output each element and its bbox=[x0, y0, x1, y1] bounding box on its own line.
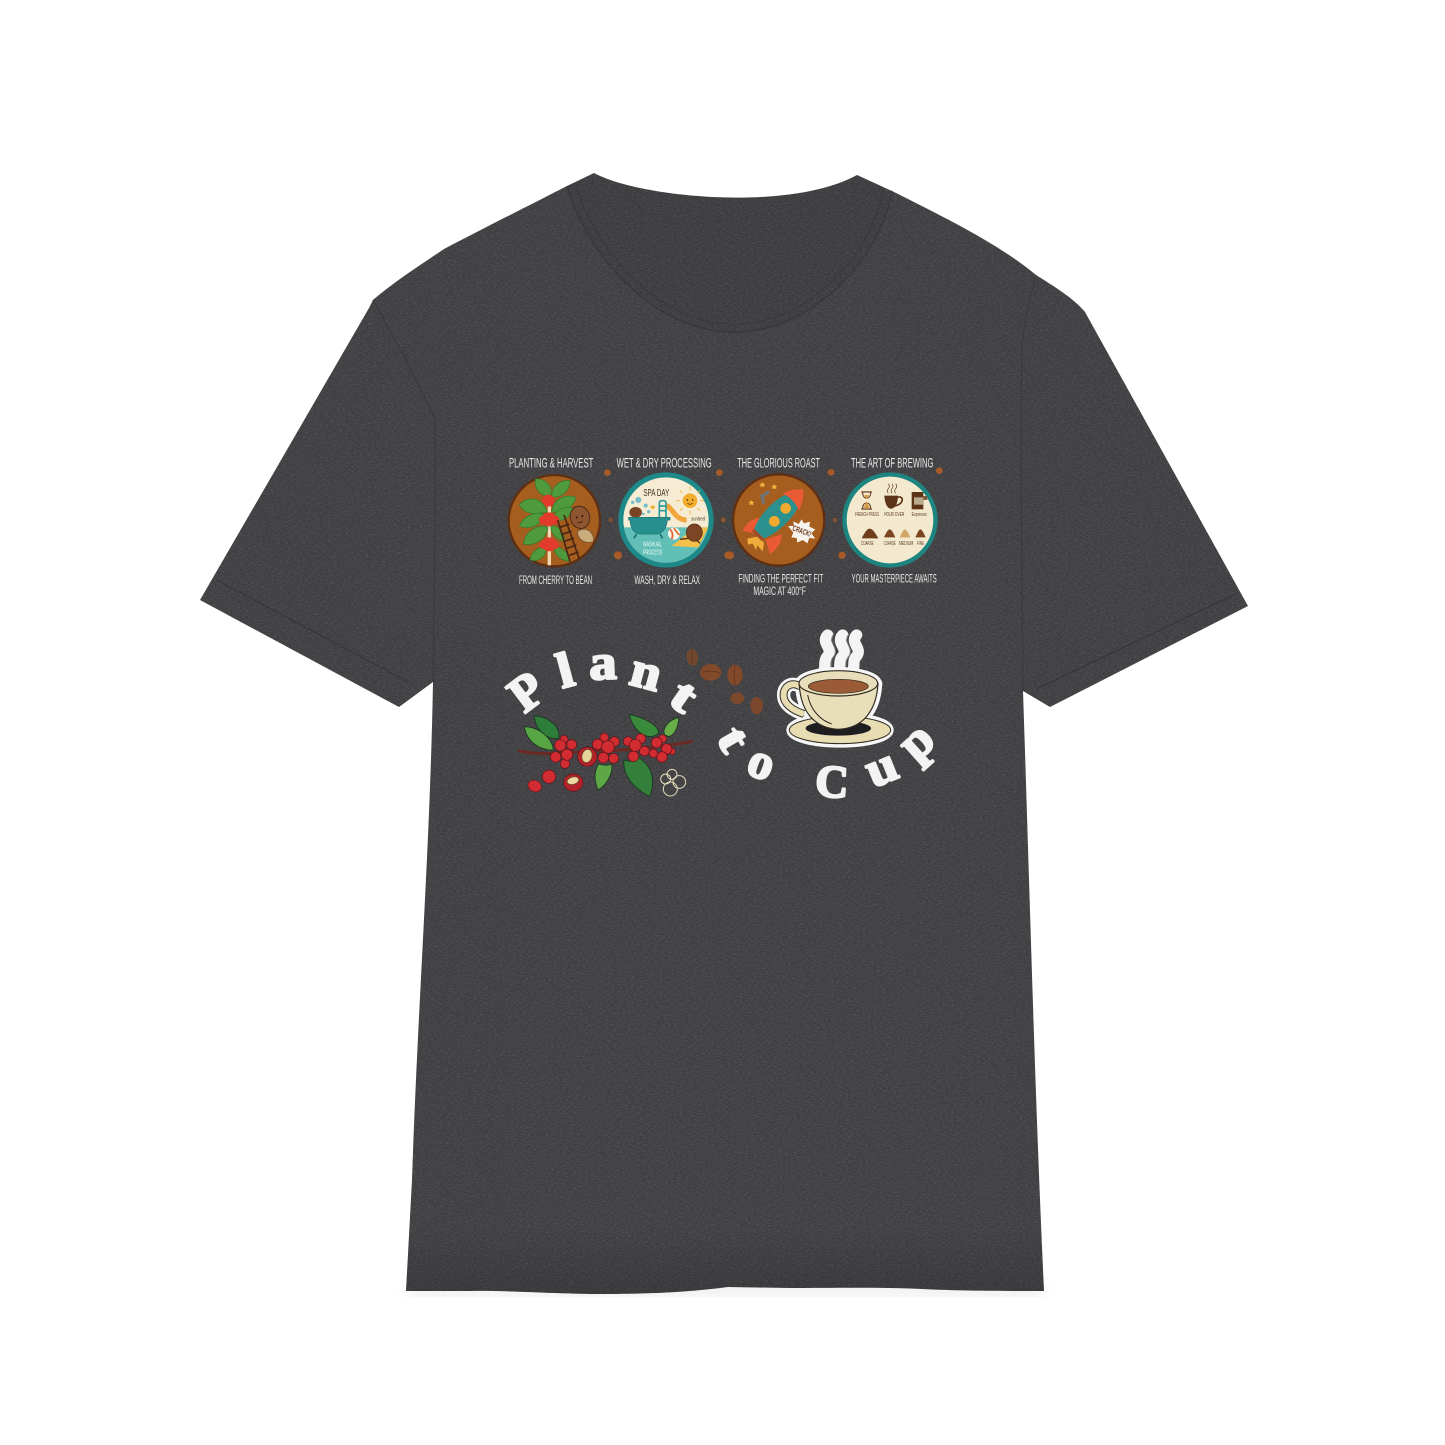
icon: spa day badge: PROCESS bbox=[643, 548, 662, 557]
title: Plant to Cup curved lettering: t bbox=[707, 717, 762, 761]
icon: brewing guide badge: Espresso bbox=[912, 512, 927, 518]
icon: spa day badge: sunbed bbox=[691, 517, 705, 523]
caption: wash dry and relax: WASH, DRY & RELAX bbox=[634, 573, 700, 587]
decorative bean dots bbox=[721, 467, 943, 559]
panel: process badges right (roasting and brewing): YOUR MASTERPIECE AWAITS bbox=[852, 572, 937, 586]
icon: brewing guide badge: MEDIUM bbox=[899, 541, 914, 547]
title: Plant to Cup curved lettering: P bbox=[497, 660, 555, 723]
icon: brewing guide badge: FRENCH PRESS bbox=[855, 512, 879, 518]
icon: spa day badge: WASHUAL bbox=[643, 540, 662, 549]
icon: brewing guide badge: COARSE bbox=[884, 541, 896, 547]
icon: brewing guide badge: POUR OVER bbox=[884, 512, 904, 518]
icon: rocket roast badge: CRACK! bbox=[791, 524, 812, 539]
icon: rocket roast badge bbox=[733, 474, 824, 566]
title: Plant to Cup curved lettering: C bbox=[814, 755, 850, 808]
illustration: scattered coffee beans bbox=[686, 648, 763, 714]
heading: planting and harvest: PLANTING & HARVEST bbox=[509, 454, 594, 470]
heading: wet and dry processing: WET & DRY PROCESSING bbox=[617, 454, 712, 470]
heading: the glorious roast: THE GLORIOUS ROAST bbox=[737, 454, 820, 470]
icon: coffee plant badge bbox=[509, 475, 600, 566]
panel: process badges left (planting and processing) bbox=[509, 454, 732, 587]
decorative bean dots bbox=[604, 469, 732, 559]
title: Plant to Cup curved lettering: a bbox=[588, 635, 618, 691]
title: Plant to Cup curved lettering: o bbox=[741, 731, 783, 792]
illustration: coffee branch with cherries bbox=[519, 714, 692, 797]
icon: spa day badge bbox=[618, 472, 714, 568]
panel: process badges right (roasting and brewing) bbox=[721, 454, 943, 598]
steam bbox=[824, 634, 858, 670]
heading: the art of brewing: THE ART OF BREWING bbox=[851, 454, 933, 470]
title: Plant to Cup curved lettering bbox=[497, 635, 945, 808]
title: Plant to Cup curved lettering: p bbox=[886, 711, 945, 772]
title: Plant to Cup curved lettering: n bbox=[625, 642, 668, 703]
title: Plant to Cup curved lettering: t bbox=[660, 668, 708, 724]
caption: finding the perfect fit, magic at 400F: MAGIC AT 400°F bbox=[753, 584, 806, 598]
title: Plant to Cup curved lettering: u bbox=[857, 736, 905, 799]
caption: from cherry to bean: FROM CHERRY TO BEAN bbox=[519, 573, 592, 587]
illustration: steaming coffee cup sticker bbox=[784, 634, 891, 744]
title: Plant to Cup curved lettering: l bbox=[551, 642, 580, 699]
icon: spa day badge: SPA DAY bbox=[643, 488, 670, 499]
icon: brewing guide badge: FINE bbox=[917, 541, 924, 547]
icon: brewing guide badge bbox=[842, 472, 938, 568]
caption: finding the perfect fit, magic at 400F: FINDING THE PERFECT FIT bbox=[738, 572, 824, 586]
icon: brewing guide badge: COARSE bbox=[861, 541, 874, 547]
t-shirt bbox=[190, 165, 1260, 1305]
